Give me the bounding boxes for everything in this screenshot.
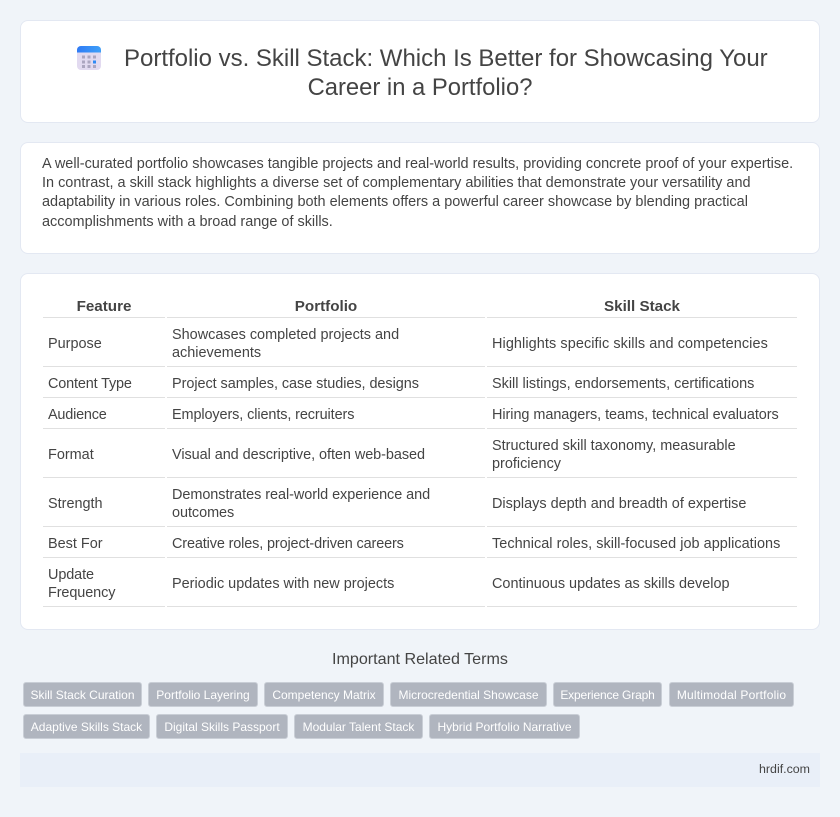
comparison table: Project samples, case studies, designs <box>172 376 419 392</box>
related term tags: Portfolio Layering <box>156 688 250 702</box>
comparison table: Skill Stack <box>604 298 680 315</box>
related term tags: Competency Matrix <box>272 688 376 702</box>
related term tags: Experience Graph <box>560 688 655 702</box>
comparison table: Showcases completed projects and <box>172 327 399 343</box>
intro paragraph: A well-curated portfolio showcases tangible projects and real-world results, providing concrete proof of your expertise. <box>42 156 793 172</box>
row: strength: Strength <box>48 496 103 512</box>
comparison table: Visual and descriptive, often web-based <box>172 447 425 463</box>
row: update frequency: Update <box>48 567 94 583</box>
row: purpose: Purpose <box>48 336 102 352</box>
comparison table: Employers, clients, recruiters <box>172 407 354 423</box>
comparison table: Continuous updates as skills develop <box>492 576 730 592</box>
comparison table: Creative roles, project-driven careers <box>172 536 404 552</box>
row: update frequency <box>48 567 116 601</box>
footer source: hrdif.com <box>759 762 810 776</box>
intro paragraph: In contrast, a skill stack highlights a diverse set of complementary abilities that demonstrate your versatility and <box>42 175 751 191</box>
related term tags: Multimodal Portfolio <box>677 688 786 702</box>
panel: intro text <box>20 142 820 254</box>
panel: title header <box>20 20 820 123</box>
comparison table: Skill listings, endorsements, certifications <box>492 376 754 392</box>
related term tags: Skill Stack Curation <box>30 688 135 702</box>
related term tags: Modular Talent Stack <box>303 720 414 734</box>
comparison table: achievements <box>172 345 261 361</box>
comparison table: Demonstrates real-world experience and <box>172 487 430 503</box>
comparison table: Periodic updates with new projects <box>172 576 394 592</box>
comparison table: outcomes <box>172 505 234 521</box>
related term tags: Digital Skills Passport <box>164 720 280 734</box>
row: update frequency: Frequency <box>48 585 115 601</box>
title <box>124 45 768 101</box>
icon: calendar <box>77 46 101 70</box>
related term tags: Microcredential Showcase <box>398 688 539 702</box>
row: audience: Audience <box>48 407 107 423</box>
row: best for: Best For <box>48 536 103 552</box>
row: format: Format <box>48 447 94 463</box>
related term tags: Adaptive Skills Stack <box>31 720 142 734</box>
intro paragraph: adaptability in various roles. Combining both elements offers a powerful career showcase by blending practical <box>42 194 748 210</box>
row: content type: Content Type <box>48 376 132 392</box>
footer <box>20 753 820 787</box>
comparison table: Structured skill taxonomy, measurable <box>492 438 736 454</box>
intro paragraph: accomplishments with a broad range of skills. <box>42 214 333 230</box>
title: Career in a Portfolio? <box>308 74 532 101</box>
table header: Feature <box>77 298 131 315</box>
comparison table: Portfolio <box>295 298 357 315</box>
comparison table <box>43 298 797 607</box>
intro paragraph <box>42 156 793 230</box>
comparison table: proficiency <box>492 456 561 472</box>
panel: comparison table <box>20 273 820 630</box>
related terms heading: Important Related Terms <box>332 650 508 668</box>
comparison table: Highlights specific skills and competencies <box>492 336 768 352</box>
related term tags: Hybrid Portfolio Narrative <box>437 720 572 734</box>
comparison table: Technical roles, skill-focused job applications <box>492 536 780 552</box>
comparison table: Displays depth and breadth of expertise <box>492 496 746 512</box>
comparison table: Hiring managers, teams, technical evaluators <box>492 407 779 423</box>
related term tags <box>23 682 794 739</box>
title: Portfolio vs. Skill Stack: Which Is Better for Showcasing Your <box>124 45 768 72</box>
